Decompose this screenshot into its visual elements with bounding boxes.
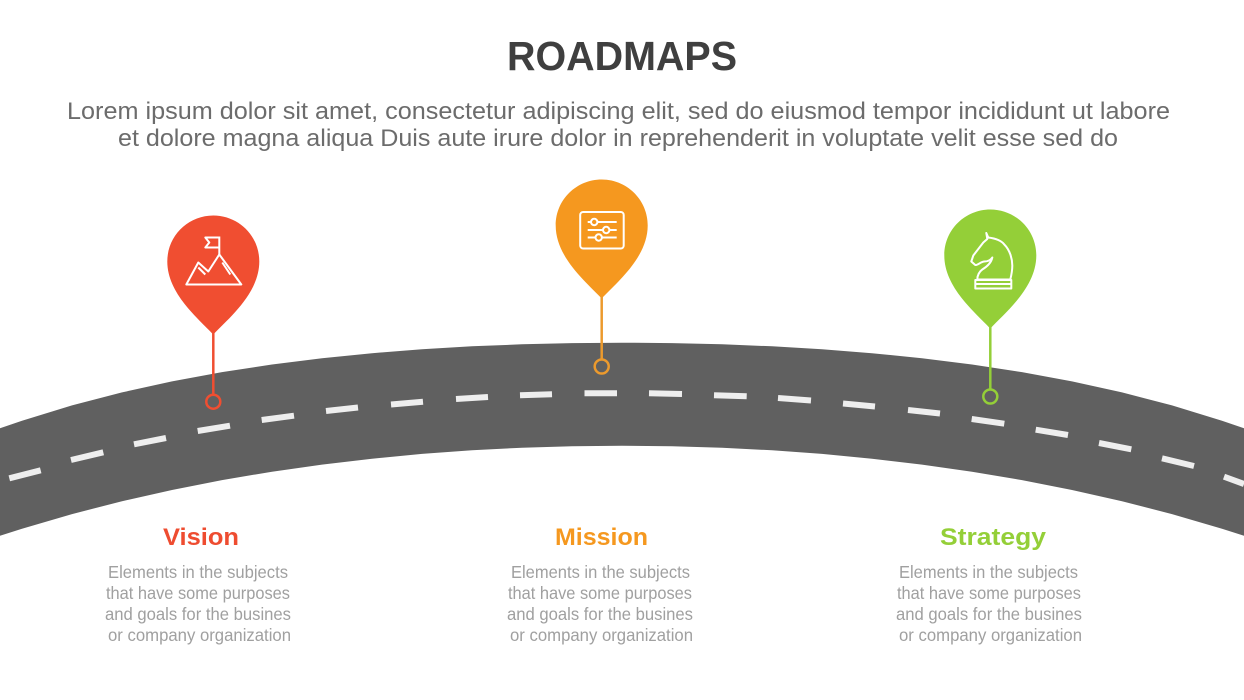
text block: strategy: Strategy [940, 524, 1047, 551]
text block: vision: and goals for the busines [105, 604, 291, 624]
text block: mission [507, 524, 693, 645]
text block: vision: that have some purposes [106, 583, 290, 603]
text block: mission: Elements in the subjects [511, 562, 690, 582]
text block: vision: or company organization [108, 625, 291, 645]
pin: mission [556, 180, 648, 374]
curved road [0, 343, 1244, 536]
icon: chess knight [971, 233, 1012, 288]
title: ROADMAPS [507, 33, 737, 79]
pin: vision [167, 216, 259, 409]
text block: strategy: Elements in the subjects [899, 562, 1078, 582]
text block: mission: and goals for the busines [507, 604, 693, 624]
text block: mission: that have some purposes [508, 583, 692, 603]
subtitle text block: et dolore magna aliqua Duis aute irure dolor in reprehenderit in voluptate velit esse sed do [118, 125, 1118, 152]
text block: strategy: or company organization [899, 625, 1082, 645]
text block: mission: Mission [555, 524, 648, 551]
icon: mountain with flag [186, 238, 241, 284]
text block: strategy [896, 524, 1082, 645]
text block: strategy: that have some purposes [897, 583, 1081, 603]
text block: strategy: and goals for the busines [896, 604, 1082, 624]
text block: vision: Elements in the subjects [108, 562, 288, 582]
text block: mission: or company organization [510, 625, 693, 645]
subtitle text block: Lorem ipsum dolor sit amet, consectetur adipiscing elit, sed do eiusmod tempor incididunt ut labore [67, 98, 1170, 125]
text block: vision [105, 524, 291, 645]
text block: vision: Vision [163, 524, 239, 551]
pin: strategy [944, 210, 1036, 404]
icon: sliders panel [580, 212, 624, 248]
subtitle text block [67, 98, 1170, 152]
